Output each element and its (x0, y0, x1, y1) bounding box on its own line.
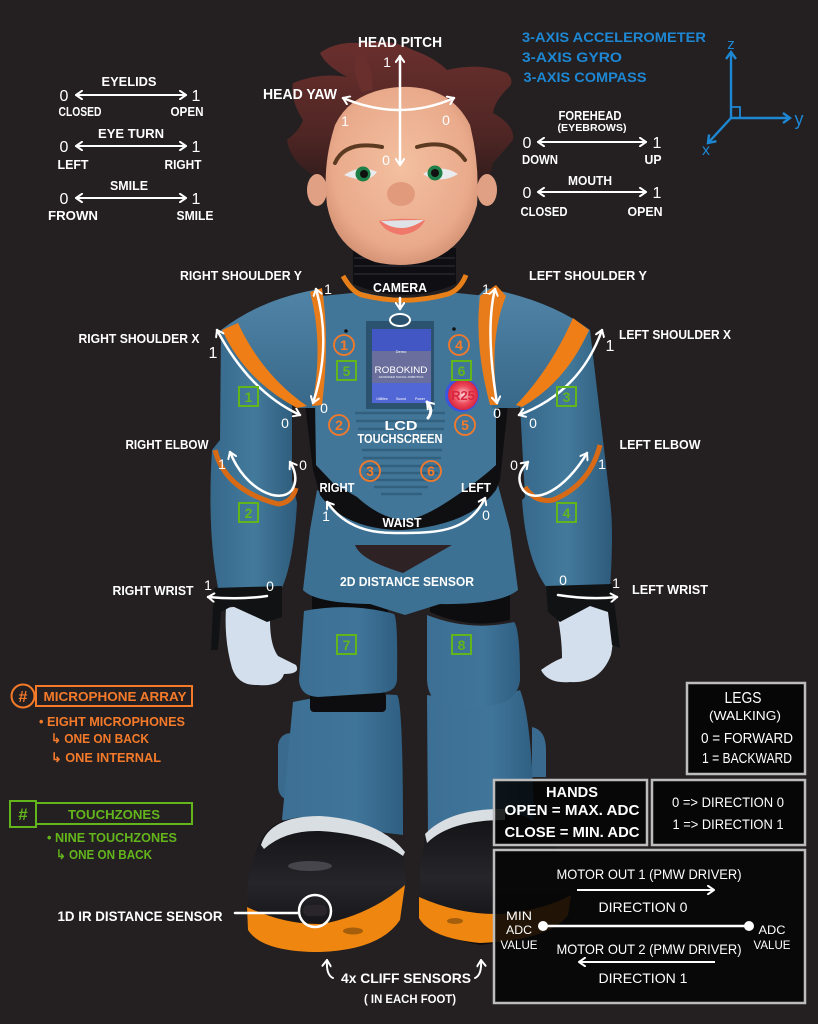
joint labels: RIGHT WRIST (112, 583, 194, 598)
legend: microphone array: # (19, 689, 28, 706)
eyelids scale: 1 (192, 88, 201, 105)
eyes (344, 169, 377, 179)
microphone position markers: 3 (366, 463, 374, 479)
LCD touchscreen display (366, 321, 434, 409)
joint range numbers: 0 (299, 457, 307, 473)
joint range numbers: 0 (559, 572, 567, 588)
eyelids scale: EYELIDS (102, 74, 157, 89)
mouth scale: MOUTH (568, 173, 612, 188)
forehead scale (522, 108, 662, 167)
robot legs (278, 590, 546, 835)
joint range numbers: 1 (482, 281, 490, 297)
axes diagram (702, 36, 804, 159)
panel: legs walking: (WALKING) (709, 708, 781, 723)
microphone position markers: 1 (340, 337, 348, 353)
joint range numbers: 1 (598, 456, 606, 472)
eye turn scale: 0 (60, 139, 69, 156)
eyelids scale: 0 (60, 88, 69, 105)
eyelids scale: OPEN (170, 104, 204, 119)
robot head (287, 42, 513, 265)
joint labels: LEFT ELBOW (620, 437, 701, 452)
panel: motor driver diagram: ADC (758, 923, 786, 937)
legend: microphone array: MICROPHONE ARRAY (44, 689, 187, 704)
head motion arrows and labels: 1 (341, 113, 349, 129)
panel: hands: HANDS (546, 784, 598, 801)
panel: hands (494, 780, 647, 845)
joint range numbers: 1 (606, 338, 615, 355)
joint labels: 2D DISTANCE SENSOR (340, 574, 475, 589)
panel: motor driver diagram: MOTOR OUT 1 (PMW DRIVER) (556, 866, 742, 882)
forehead scale: DOWN (522, 152, 558, 167)
touchzone position markers: 6 (458, 363, 466, 379)
microphone position markers: 5 (461, 417, 469, 433)
robot illustration (210, 42, 620, 952)
mouth scale: OPEN (628, 204, 662, 219)
joint range numbers: 1 (204, 577, 212, 593)
joint labels: LEFT (461, 480, 491, 495)
speaker grille (355, 413, 445, 494)
microphone position markers (329, 335, 475, 481)
LCD touchscreen display: ROBOKIND (374, 365, 428, 376)
panel: hands: CLOSE = MIN. ADC (504, 824, 640, 841)
panel: motor driver diagram: MIN (506, 909, 532, 923)
label: cliff sensors with arrows (327, 960, 481, 1006)
robot boots (247, 809, 571, 952)
mouth scale: 0 (523, 185, 532, 202)
eye turn scale: 1 (192, 139, 201, 156)
joint range numbers: 1 (324, 281, 332, 297)
legend: touchzones: TOUCHZONES (68, 807, 160, 822)
label: 1D IR distance sensor: 1D IR DISTANCE SENSOR (58, 908, 222, 924)
joint labels: LEFT SHOULDER X (619, 327, 731, 342)
eye turn scale: LEFT (58, 157, 89, 172)
head motion arrows and labels: 0 (382, 152, 390, 168)
joint labels: LCD (384, 418, 418, 433)
forehead scale: FOREHEAD (558, 108, 622, 123)
head motion arrows and labels: 0 (442, 112, 450, 128)
joint range numbers: 0 (482, 507, 490, 523)
joint range numbers: 1 (218, 456, 226, 472)
legend: touchzones: # (18, 805, 28, 824)
panel: motor driver diagram: VALUE (500, 938, 538, 952)
panel: direction key: 1 => DIRECTION 1 (672, 816, 784, 832)
panel: legs walking (687, 683, 805, 774)
IMU sensor list (522, 29, 706, 85)
joint range numbers: 0 (266, 578, 274, 594)
panel: motor driver diagram: ADC (506, 923, 532, 937)
LCD touchscreen display: Utilities (376, 397, 388, 401)
mouth scale: CLOSED (520, 204, 568, 219)
joint range numbers: 0 (493, 405, 501, 421)
IMU sensor list: 3-AXIS COMPASS (524, 69, 646, 85)
smile scale: FROWN (48, 208, 98, 223)
mouth (379, 219, 425, 235)
joint range numbers (204, 281, 620, 594)
touchzone position markers: 7 (343, 637, 351, 653)
touchzone position markers: 3 (563, 389, 571, 405)
head motion arrows and labels: HEAD PITCH (358, 34, 442, 51)
mouth scale (520, 173, 662, 219)
LCD touchscreen display: Sound (396, 397, 406, 401)
forehead scale: UP (644, 152, 662, 167)
eyebrows (335, 144, 465, 163)
joint range numbers: 0 (510, 457, 518, 473)
IMU sensor list: 3-AXIS GYRO (522, 49, 622, 65)
joint range numbers: 0 (320, 400, 328, 416)
microphone position markers: 6 (427, 463, 435, 479)
LCD touchscreen display: ADVANCED SOCIAL ROBOTICS (379, 375, 423, 379)
axes diagram: x (702, 142, 710, 159)
robot torso (221, 285, 590, 615)
label: cliff sensors with arrows: 4x CLIFF SENSORS (341, 970, 471, 986)
robot left arm (520, 330, 620, 682)
joint labels: LEFT SHOULDER Y (529, 268, 647, 283)
legend: microphone array: • EIGHT MICROPHONES (39, 714, 185, 729)
microphone position markers: 4 (455, 337, 463, 353)
panel: legs walking: 0 = FORWARD (701, 730, 793, 747)
panel: direction key: 0 => DIRECTION 0 (672, 794, 784, 810)
robot right arm (210, 330, 297, 685)
R25 badge: R25 (451, 388, 475, 403)
joint labels (78, 268, 731, 598)
joint labels: TOUCHSCREEN (358, 431, 442, 446)
panel: legs walking: 1 = BACKWARD (702, 750, 792, 767)
panel: motor driver diagram: VALUE (754, 938, 790, 952)
smile scale (48, 178, 214, 223)
panel: hands: OPEN = MAX. ADC (504, 802, 640, 819)
joint range numbers: 1 (612, 575, 620, 591)
legend: microphone array: ↳ ONE ON BACK (51, 731, 150, 746)
R25 badge (445, 378, 479, 412)
legend: touchzones: ↳ ONE ON BACK (56, 847, 153, 862)
joint labels: RIGHT SHOULDER X (78, 331, 200, 346)
smile scale: 1 (192, 191, 201, 208)
panel: motor driver diagram: DIRECTION 1 (598, 970, 688, 986)
eyelids scale: CLOSED (58, 104, 102, 119)
joint range numbers: 1 (209, 345, 218, 362)
touchzone position markers: 1 (245, 389, 253, 405)
forehead scale: 0 (523, 135, 532, 152)
IMU sensor list: 3-AXIS ACCELEROMETER (522, 29, 706, 45)
legend: microphone array (12, 684, 192, 765)
joint labels: RIGHT ELBOW (126, 437, 209, 452)
touchzone position markers: 4 (563, 505, 571, 521)
joint labels: RIGHT SHOULDER Y (180, 268, 302, 283)
head motion arrows and labels: HEAD YAW (263, 86, 338, 103)
touchzone position markers (239, 361, 576, 654)
LCD touchscreen display: Demo (396, 349, 407, 354)
smile scale: SMILE (110, 178, 148, 193)
eye turn scale: EYE TURN (98, 126, 164, 141)
joint labels: CAMERA (373, 280, 428, 295)
legend: touchzones (10, 801, 192, 862)
legend: touchzones: • NINE TOUCHZONES (47, 830, 177, 845)
joint labels: WAIST (382, 515, 422, 530)
panel: motor driver diagram (494, 850, 805, 1003)
panel: direction key (652, 780, 805, 845)
eyelids scale (58, 74, 204, 119)
joint range numbers: 0 (281, 415, 289, 431)
joint labels: RIGHT (320, 480, 355, 495)
smile scale: 0 (60, 191, 69, 208)
head motion arrows and labels (263, 34, 454, 168)
legend: microphone array: ↳ ONE INTERNAL (51, 750, 161, 765)
panel: legs walking: LEGS (724, 690, 762, 707)
joint labels: LEFT WRIST (632, 582, 708, 597)
label: cliff sensors with arrows: ( IN EACH FOOT) (364, 992, 456, 1006)
eye turn scale: RIGHT (164, 157, 202, 172)
touchzone position markers: 8 (458, 637, 466, 653)
smile scale: SMILE (176, 208, 214, 223)
nose (387, 182, 415, 206)
joint range numbers: 0 (529, 415, 537, 431)
mouth scale: 1 (653, 185, 662, 202)
joint range numbers: 1 (322, 508, 330, 524)
touchzone position markers: 5 (343, 363, 351, 379)
joint motion arrows (208, 289, 617, 927)
panel: motor driver diagram: DIRECTION 0 (598, 899, 688, 915)
LCD touchscreen display: Power (415, 397, 426, 401)
head motion arrows and labels: 1 (383, 54, 391, 70)
neck and collar (343, 248, 466, 300)
eye turn scale (58, 126, 202, 172)
forehead scale: (EYEBROWS) (558, 123, 626, 134)
axes diagram: z (727, 36, 735, 53)
touchzone position markers: 2 (245, 505, 253, 521)
forehead scale: 1 (653, 135, 662, 152)
panel: motor driver diagram: MOTOR OUT 2 (PMW DRIVER) (556, 941, 742, 957)
microphone position markers: 2 (335, 417, 343, 433)
axes diagram: y (794, 109, 804, 129)
